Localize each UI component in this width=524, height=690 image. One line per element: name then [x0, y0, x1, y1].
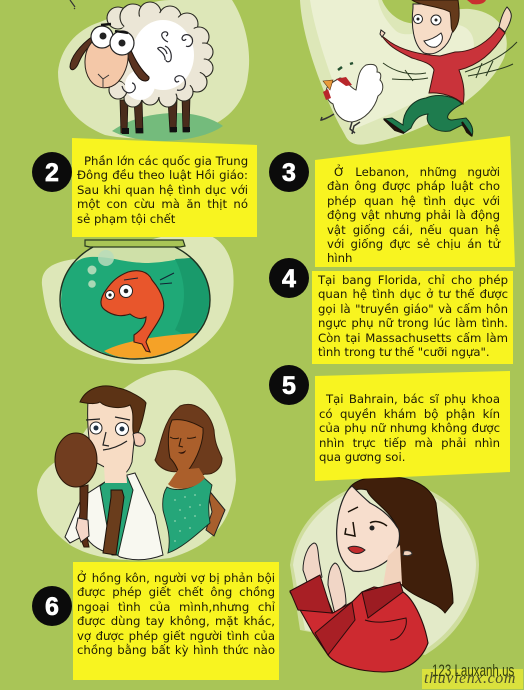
- text panel: fact 6: chồng bằng bất kỳ hình thức nào: [77, 643, 275, 657]
- illustration: goldfish in bowl: [42, 232, 234, 364]
- text panel: fact 3: động vật nhưng phải là động: [327, 208, 500, 222]
- text panel: fact 5: nhìn trực tiếp mà phải nhìn: [319, 436, 500, 450]
- text panel: fact 6: ngoại tình của mình,nhưng chỉ: [77, 600, 275, 614]
- watermark: thuvienx: thuvienx.com: [424, 670, 516, 687]
- illustration: doctor and woman: [37, 370, 236, 560]
- text panel: fact 3: [315, 136, 515, 267]
- text panel: fact 6: [73, 562, 279, 680]
- number badge 2: [32, 152, 72, 192]
- text panel: fact 6: Ở hồng kôn, người vợ bị phản bội: [77, 571, 275, 585]
- number badge 4: 4: [282, 265, 296, 293]
- number badge 3: [269, 152, 309, 192]
- text panel: fact 4: [312, 271, 513, 364]
- text panel: fact 4: gọi là "truyền giáo" và cấm hôn: [318, 302, 508, 316]
- number badge 4: [269, 258, 309, 298]
- watermark: 123 Lauxanh: 123 Lauxanh.us: [432, 661, 514, 680]
- text panel: fact 5: của phụ nữ nhưng không được: [319, 421, 500, 435]
- number badge 5: [269, 365, 309, 405]
- text panel: fact 6: được phép giết chết ông chồng: [77, 585, 275, 599]
- text panel: fact 4: Tại bang Florida, chỉ cho phép: [318, 273, 508, 287]
- text panel: fact 3: Ở Lebanon, những người: [334, 165, 500, 179]
- text panel: fact 5: có quyền khám bộ phận kín: [319, 407, 500, 421]
- text panel: fact 3: phép quan hệ tình dục với: [327, 194, 500, 208]
- text panel: fact 5: Tại Bahrain, bác sĩ phụ khoa: [326, 392, 500, 406]
- illustration: sheep: [58, 0, 249, 141]
- text panel: fact 5: qua gương soi.: [319, 450, 405, 464]
- text panel: fact 4: tình trong tư thế "cưỡi ngựa".: [318, 345, 490, 359]
- number badge 6: 6: [45, 593, 59, 621]
- text panel: fact 2: [72, 138, 257, 237]
- number badge 5: 5: [282, 372, 296, 400]
- text panel: fact 3: với giống đực sẻ chịu án tử: [327, 237, 500, 251]
- number badge 2: 2: [45, 159, 59, 187]
- text panel: fact 2: Sau khi quan hệ tình dục với: [77, 183, 248, 197]
- number badge 6: [32, 586, 72, 626]
- text panel: fact 4: ngực phụ nữ trong lúc làm tình.: [318, 316, 508, 330]
- text panel: fact 3: vật giống cái, nếu quan hệ: [327, 223, 500, 237]
- illustration: woman in red: [290, 477, 479, 672]
- text panel: fact 4: quan hệ tình dục ở tư thế được: [318, 287, 508, 301]
- text panel: fact 6: được dùng tay không, mặt khác,: [77, 614, 275, 628]
- text panel: fact 4: Còn tại Massachusetts cấm làm: [318, 331, 508, 345]
- text panel: fact 2: một con cừu mà ăn thịt nó: [77, 197, 248, 211]
- illustration: man chasing chicken: [300, 0, 517, 145]
- text panel: fact 2: sẻ phạm tội chết: [77, 212, 175, 226]
- text panel: fact 2: Đông đều theo luật Hồi giáo:: [77, 168, 248, 182]
- text panel: fact 6: vợ được phép giết người tình của: [77, 629, 275, 643]
- number badge 3: 3: [282, 159, 296, 187]
- text panel: fact 3: hình: [327, 251, 352, 265]
- text panel: fact 2: Phần lớn các quốc gia Trung: [84, 154, 248, 168]
- text panel: fact 3: đàn ông được pháp luật cho: [327, 179, 500, 193]
- text panel: fact 5: [315, 371, 510, 481]
